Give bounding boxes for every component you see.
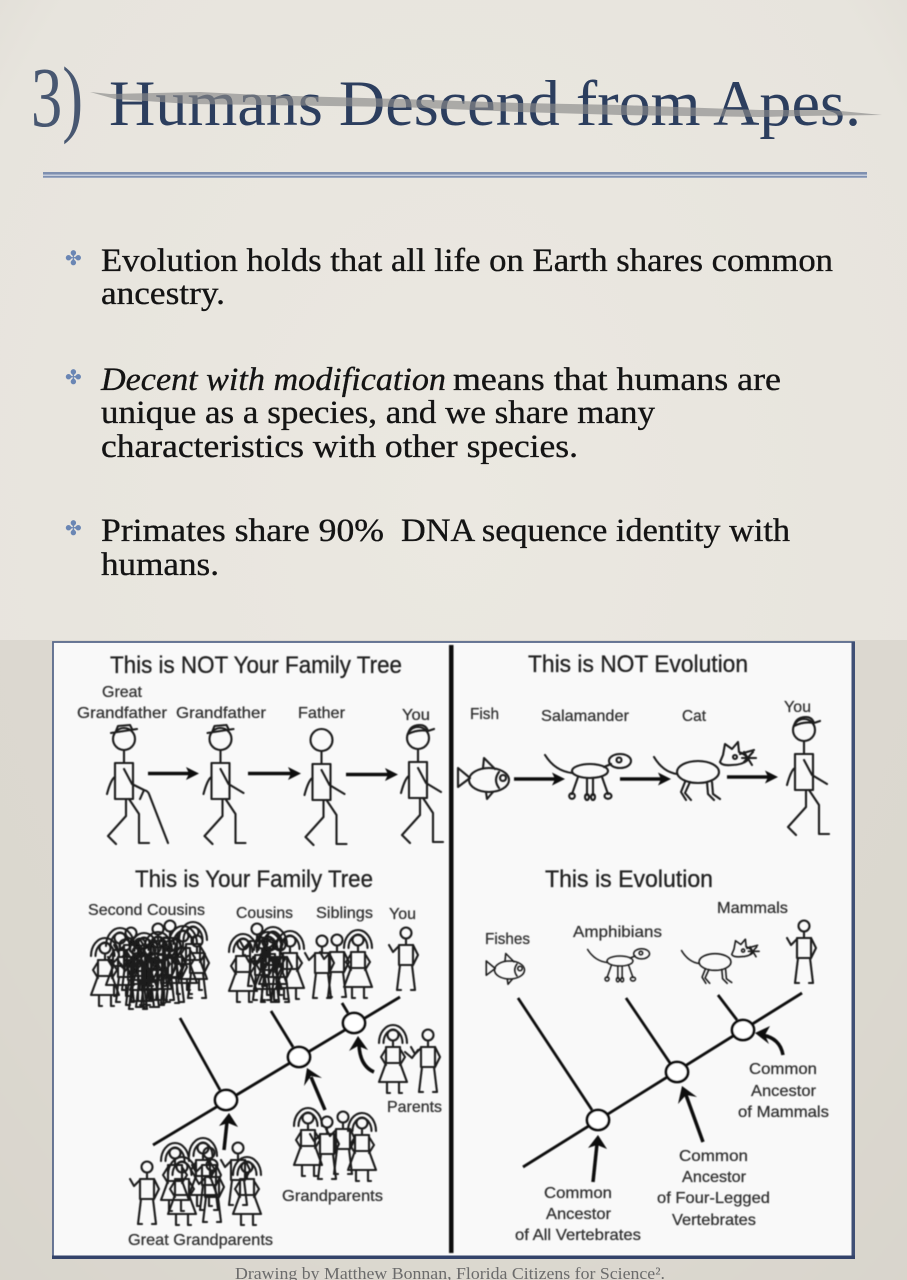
title: Humans Descend from Apes. <box>109 68 861 140</box>
labels: common ancestors <box>515 1061 829 1244</box>
bullet 3: ✤ <box>65 516 82 540</box>
labels: common ancestors: Ancestor <box>751 1083 817 1100</box>
labels: ancestors chain: Grandfather <box>176 705 267 722</box>
group: parents <box>379 1025 440 1093</box>
heading: not your family tree: This is NOT Your Family Tree <box>110 652 402 679</box>
labels: groups: Fishes <box>485 931 530 948</box>
heading: your family tree: This is Your Family Tree <box>135 866 373 893</box>
arrow: salamander to cat <box>620 772 671 786</box>
group: great grandparents <box>130 1138 261 1225</box>
brush strikethrough <box>90 92 882 117</box>
heading: not evolution: This is NOT Evolution <box>528 651 748 678</box>
arrow: great grandfather to grandfather <box>148 767 199 780</box>
bullet 2: Decent with modification <box>100 362 446 398</box>
bullet list <box>65 243 833 583</box>
labels: common ancestors: Vertebrates <box>672 1212 756 1229</box>
bullet 1 <box>65 243 833 312</box>
heading: evolution: This is Evolution <box>545 866 713 893</box>
arrow: grandparents to node <box>304 1068 325 1110</box>
arrow: parents to node <box>349 1036 374 1072</box>
labels: common ancestors: Common <box>679 1148 748 1165</box>
labels: ancestors <box>128 1099 442 1249</box>
panel: family tree versus evolution diagram <box>52 642 855 1259</box>
title: 3) <box>31 49 83 145</box>
labels: relatives: Siblings <box>316 905 373 922</box>
bullet 2 <box>65 362 781 465</box>
panel: evolution <box>485 866 829 1244</box>
group: siblings <box>305 930 372 998</box>
arrow: common ancestor of mammals <box>755 1026 783 1055</box>
bullet 3: humans. <box>101 547 219 583</box>
arrow: common ancestor of four-legged vertebrates <box>678 1086 703 1142</box>
icon: salamander small <box>588 949 650 982</box>
bullet 2: unique as a species, and we share many <box>101 395 656 431</box>
bullet 2: ✤ <box>65 365 82 389</box>
title <box>31 49 861 145</box>
arrow: father to you <box>346 768 398 781</box>
labels: groups: Amphibians <box>573 924 662 941</box>
labels: ancestors: Great Grandparents <box>128 1232 273 1249</box>
bullet 2: characteristics with other species. <box>101 429 578 465</box>
labels: species chain: You <box>784 699 811 716</box>
labels: species chain: Salamander <box>541 708 630 725</box>
arrow: fish to salamander <box>514 772 565 786</box>
bullet 3: DNA sequence identity with <box>401 513 791 549</box>
labels: relatives: You <box>389 906 416 923</box>
figure: grandfather <box>204 725 246 844</box>
crowd: cousins <box>229 924 304 1002</box>
labels: common ancestors: of All Vertebrates <box>515 1227 641 1244</box>
labels: common ancestors: Ancestor <box>546 1206 612 1223</box>
labels: common ancestors: of Four-Legged <box>657 1190 770 1207</box>
figure: great grandfather with cane <box>107 725 168 844</box>
icon: fish <box>458 758 509 799</box>
icon: fish small <box>486 954 524 984</box>
bullet 3 <box>65 513 791 583</box>
bullet 1: Evolution holds that all life on Earth shares common <box>101 243 833 279</box>
bullet 3: Primates share 90% <box>101 513 384 549</box>
arrow: cat to you <box>727 770 778 784</box>
arrow: great grandparents to node <box>219 1113 238 1150</box>
title rule <box>43 172 867 178</box>
arrow: grandfather to father <box>248 767 301 780</box>
icon: cat small <box>682 939 759 983</box>
icon: salamander <box>545 754 631 800</box>
labels: ancestors chain: Great <box>102 684 143 701</box>
icon: cat <box>654 742 756 800</box>
labels: species chain <box>470 699 811 725</box>
labels: common ancestors: Common <box>749 1061 817 1078</box>
bullet 1: ✤ <box>65 246 82 270</box>
labels: common ancestors: Ancestor <box>682 1169 747 1186</box>
panel: not your family tree <box>77 652 443 845</box>
figure: human <box>787 920 816 983</box>
crowd: second cousins <box>91 920 209 1009</box>
tree: evolution lines and nodes <box>518 993 802 1167</box>
labels: species chain: Cat <box>682 708 707 725</box>
bullet 1: ancestry. <box>101 276 225 312</box>
figure: you <box>787 717 829 835</box>
figure: you <box>401 725 443 843</box>
labels: groups <box>485 900 788 948</box>
labels: relatives <box>88 902 416 923</box>
labels: ancestors: Parents <box>387 1099 442 1116</box>
labels: ancestors chain: You <box>402 707 430 724</box>
labels: relatives: Second Cousins <box>88 902 205 919</box>
bullet 2: means that humans are <box>453 362 781 398</box>
labels: groups: Mammals <box>717 900 788 917</box>
labels: common ancestors: Common <box>544 1185 612 1202</box>
labels: species chain: Fish <box>470 706 499 723</box>
panel: not evolution <box>458 651 829 835</box>
labels: relatives: Cousins <box>236 905 293 922</box>
group: grandparents <box>294 1108 376 1181</box>
center divider <box>449 645 454 1253</box>
panel: your family tree <box>88 866 442 1249</box>
figure: you <box>389 928 418 990</box>
figure: father <box>304 729 346 845</box>
tree: family lines and nodes <box>153 997 400 1145</box>
labels: ancestors: Grandparents <box>282 1188 383 1205</box>
labels: ancestors chain <box>77 684 430 724</box>
labels: ancestors chain: Grandfather <box>77 705 168 722</box>
arrow: common ancestor of vertebrates <box>588 1135 607 1182</box>
labels: ancestors chain: Father <box>298 705 346 722</box>
labels: common ancestors: of Mammals <box>738 1104 829 1121</box>
